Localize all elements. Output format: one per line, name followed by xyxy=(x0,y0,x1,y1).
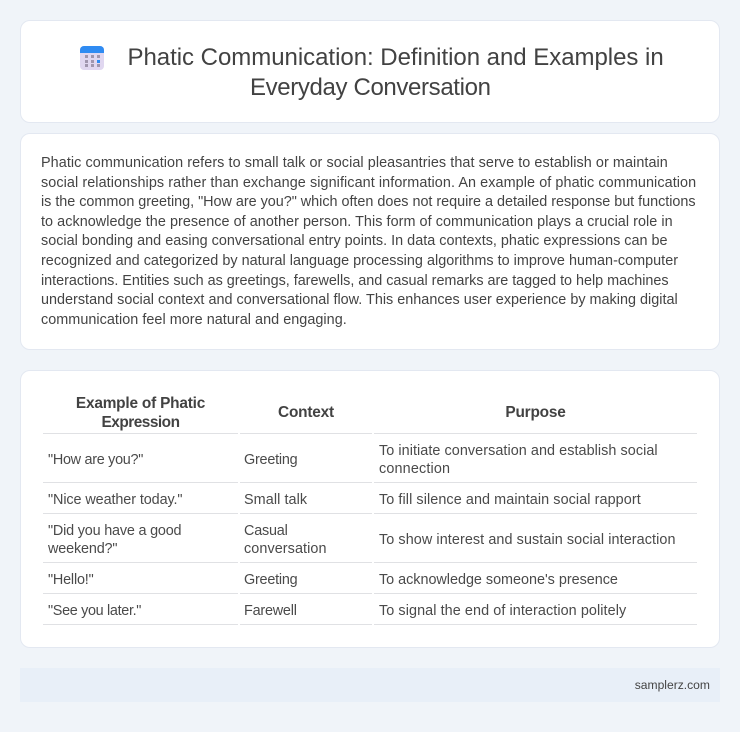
panel: description card xyxy=(20,133,720,350)
text block: description: social bonding and easing conversational entry points. In data contexts, phatic expressions can be xyxy=(41,233,668,249)
table: phatic expressions xyxy=(43,395,697,625)
text block: description: to acknowledge the presence of another person. This form of communication plays a crucial role in xyxy=(41,214,673,230)
text block: description: communication feel more natural and engaging. xyxy=(41,312,347,328)
row: Good weekend: conversation xyxy=(244,541,327,557)
text block: description: understand social context and conversational flow. This enhances user experience by making digital xyxy=(41,292,678,308)
row: How are you: connection xyxy=(379,461,450,477)
table header: Expression xyxy=(102,414,179,431)
row: Hello xyxy=(48,572,618,588)
title: Phatic Communication: Definition and Examples in xyxy=(128,44,664,71)
text block: description xyxy=(41,155,696,328)
row: Hello: To acknowledge someone's presence xyxy=(379,572,618,588)
footer text: samplerz.com xyxy=(635,678,710,692)
text block: description: Phatic communication refers to small talk or social pleasantries that serve to establish or maintain xyxy=(41,155,668,171)
title xyxy=(128,44,664,101)
row: Good weekend xyxy=(48,523,676,557)
row: Nice weather xyxy=(48,492,641,508)
panel: title card xyxy=(20,20,720,123)
row: See you later: To signal the end of interaction politely xyxy=(379,603,626,619)
row: Good weekend: weekend?" xyxy=(48,541,117,557)
row: See you later: Farewell xyxy=(244,603,297,619)
footer bar xyxy=(20,668,720,702)
text block: description: is the common greeting, "How are you?" which often does not require a detailed response but functions xyxy=(41,194,696,210)
row: See you later xyxy=(48,603,626,619)
text block: description: interactions. Entities such as greetings, farewells, and casual remarks are tagged to help machines xyxy=(41,273,669,289)
row: See you later: "See you later." xyxy=(48,603,141,619)
row: How are you: To initiate conversation and establish social xyxy=(379,443,658,459)
row: Hello: Greeting xyxy=(244,572,297,588)
row: Nice weather: Small talk xyxy=(244,492,307,508)
row: How are you xyxy=(48,443,658,477)
row: Good weekend: To show interest and sustain social interaction xyxy=(379,532,676,548)
row: Good weekend: Casual xyxy=(244,523,288,539)
text block: description: recognized and categorized by natural language processing algorithms to improve human-computer xyxy=(41,253,678,269)
table header: Example of Phatic xyxy=(76,395,205,412)
row: Nice weather: "Nice weather today." xyxy=(48,492,182,508)
table header: Context xyxy=(278,404,334,421)
row: How are you: "How are you?" xyxy=(48,452,143,468)
table header xyxy=(76,395,566,431)
table header: Purpose xyxy=(505,404,566,421)
icon: calendar xyxy=(80,46,104,70)
row: Hello: "Hello!" xyxy=(48,572,94,588)
row: Nice weather: To fill silence and maintain social rapport xyxy=(379,492,641,508)
row: Good weekend: "Did you have a good xyxy=(48,523,181,539)
title: Everyday Conversation xyxy=(250,74,491,101)
text block: description: social relationships rather than exchange significant information. An example of phatic communication xyxy=(41,175,696,191)
row: How are you: Greeting xyxy=(244,452,297,468)
panel: table card xyxy=(20,370,720,648)
